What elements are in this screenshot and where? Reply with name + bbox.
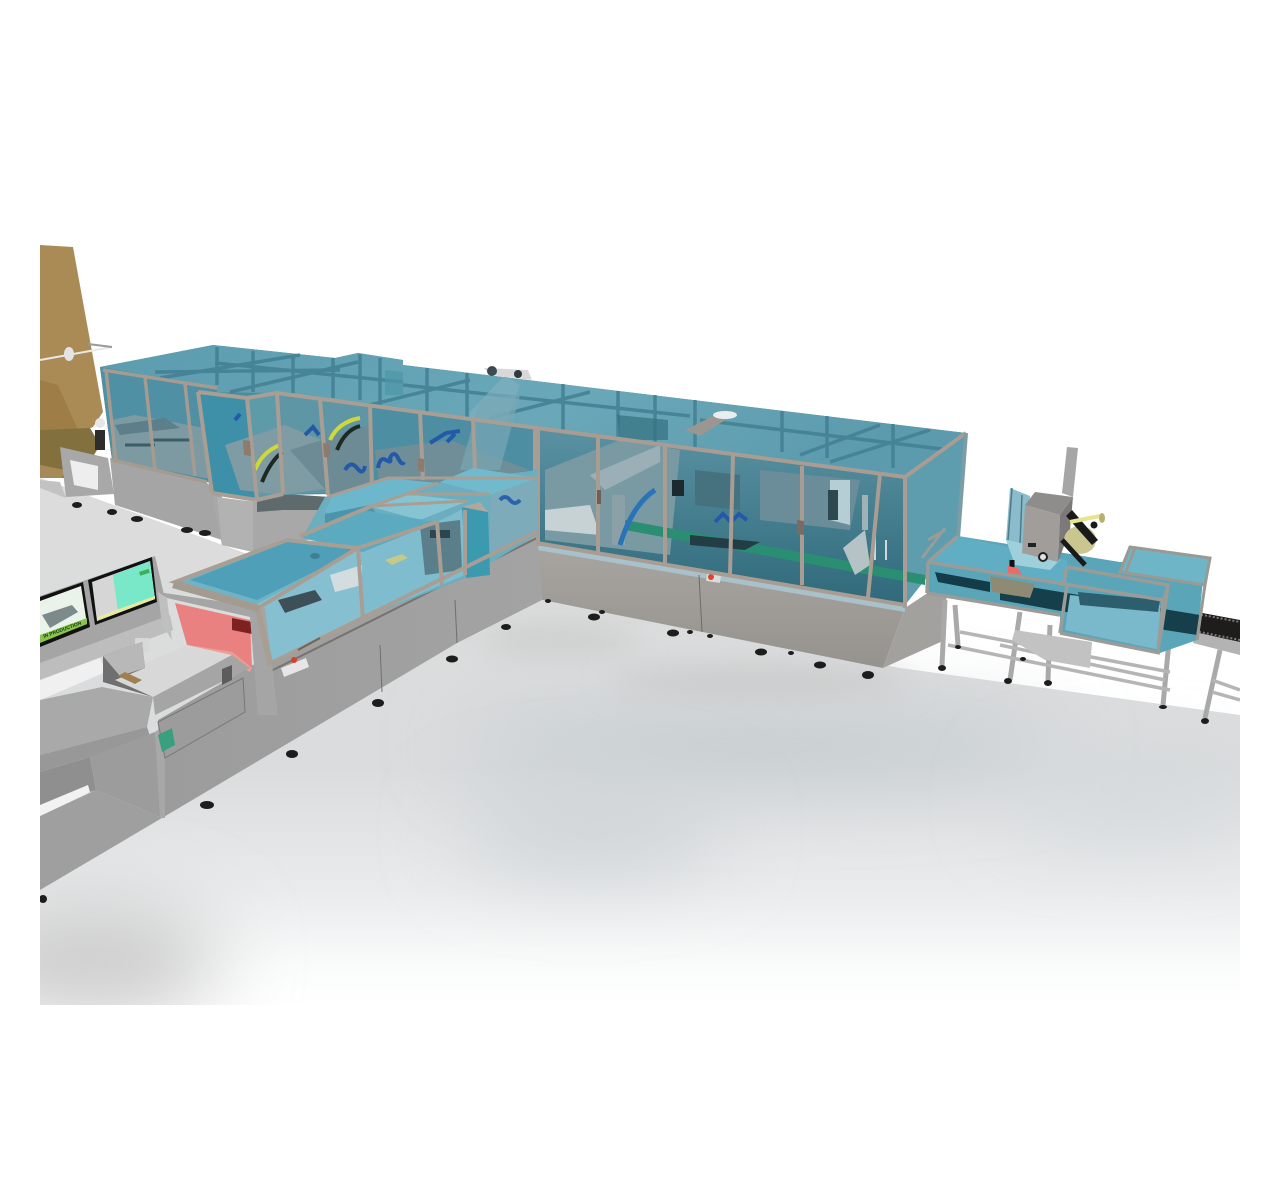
frames [537,428,966,608]
main machine base [537,543,947,668]
rear glass bay tops [302,468,538,618]
main front glass section [537,428,966,608]
incline ramp [470,376,520,420]
roof grid [155,347,950,468]
cardboard stack [40,245,112,478]
roll on top [484,368,532,380]
interior objects [278,590,322,613]
left front glass section [100,367,217,482]
outfeed conveyor [1193,612,1240,655]
frame [198,392,537,500]
hazard-striped rollers [255,418,360,482]
control box [281,657,309,677]
interior [545,440,680,555]
labeling enclosure frame [922,528,1168,653]
operator desk back panel and shelf [40,556,173,700]
blue arm [620,490,655,545]
bay 1 interior [181,542,363,624]
guide plates [1006,488,1060,570]
labeler column [1062,447,1078,497]
infeed station [40,447,114,498]
labeling conveyor enclosure [927,536,1205,653]
monitor: production view [40,582,90,647]
blue robots [235,414,460,472]
bay 1 roof [190,542,358,600]
L-arm machine base [158,530,542,818]
main enclosure [100,345,966,605]
illustration: automated packaging line [40,245,1240,1005]
operator desk [40,687,165,890]
feet [39,502,874,903]
tall column [462,507,490,578]
machinery inside bays [225,425,324,495]
centre pedestal [212,494,330,552]
top unit on roof [685,410,738,436]
floor [0,478,1250,1020]
bay 1 front [257,550,363,662]
bay glass bottom frame [172,580,320,668]
labeling conveyor legs [938,600,1240,724]
right interior station [843,530,870,575]
rear machine base [110,458,222,540]
labeler head [1008,492,1105,575]
bay 2 [358,508,465,618]
red light interior [175,603,252,668]
panel below plate [158,678,245,758]
roof glass [100,345,966,477]
green conveyor [625,520,925,585]
frame [175,506,537,662]
tray [103,642,153,697]
conveyor plate [103,645,232,697]
centre-left glass bay [198,392,537,500]
rear wall [100,345,966,605]
monitor: data screen [88,557,157,625]
monitor: production view: IN PRODUCTION [43,620,83,640]
portal frame [158,592,278,715]
inner back darker sections [617,415,668,440]
rear labeler glass box [1120,547,1210,640]
scanner portal [103,592,278,758]
L-arm glass bays [175,497,537,662]
